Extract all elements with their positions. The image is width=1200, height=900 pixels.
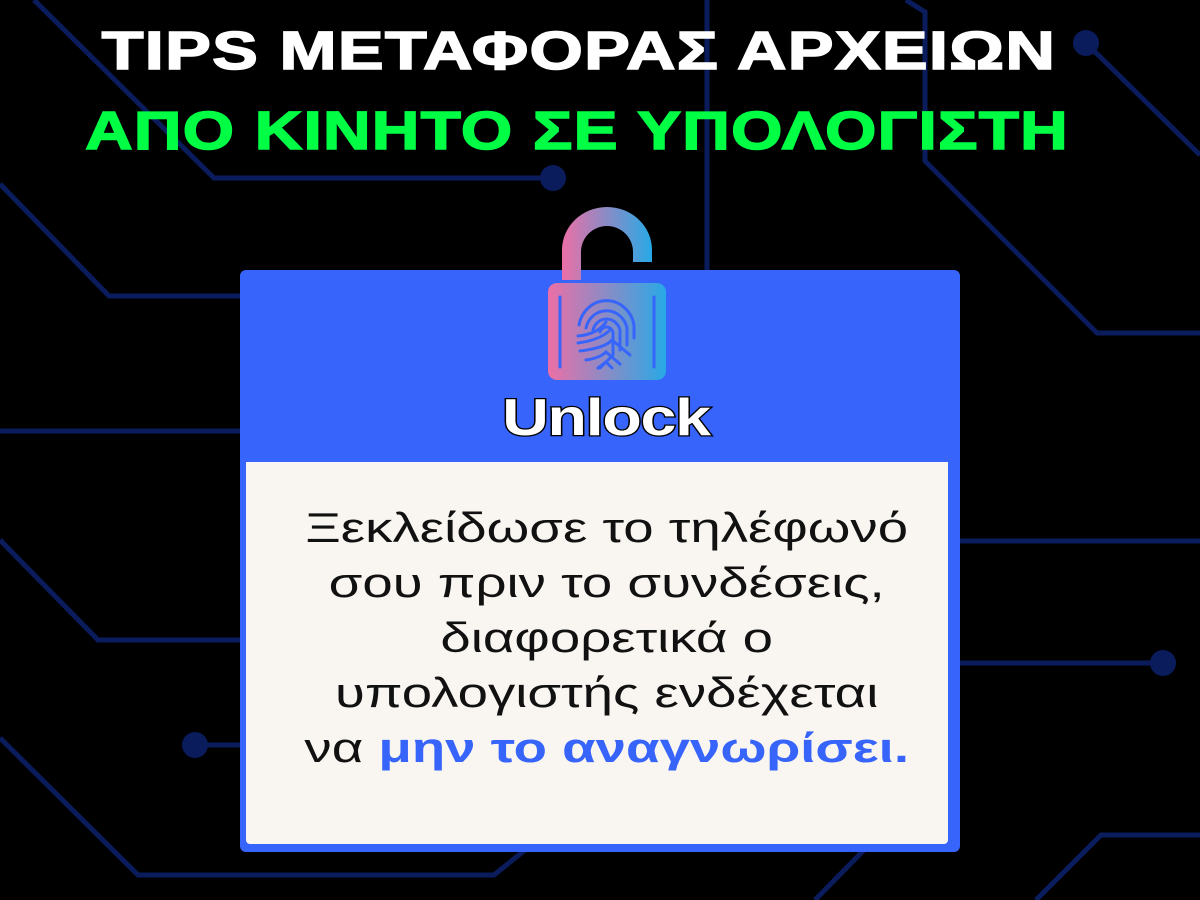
- card: [240, 270, 960, 852]
- icon: fingerprint padlock: [548, 207, 666, 380]
- heading: Unlock: Unlock: [502, 389, 710, 447]
- body text: σου πριν το συνδέσεις,: [329, 559, 885, 606]
- body text: [304, 504, 909, 771]
- title line 2: ΑΠΟ ΚΙΝΗΤΟ ΣΕ ΥΠΟΛΟΓΙΣΤΗ: [85, 101, 1069, 161]
- card body: [246, 462, 948, 844]
- body text: υπολογιστής ενδέχεται: [335, 669, 878, 716]
- body text: να μην το αναγνωρίσει.: [304, 724, 909, 771]
- title line 1: TIPS ΜΕΤΑΦΟΡΑΣ ΑΡΧΕΙΩΝ: [102, 21, 1056, 81]
- body text: Ξεκλείδωσε το τηλέφωνό: [305, 504, 908, 551]
- body text: διαφορετικά ο: [440, 614, 773, 661]
